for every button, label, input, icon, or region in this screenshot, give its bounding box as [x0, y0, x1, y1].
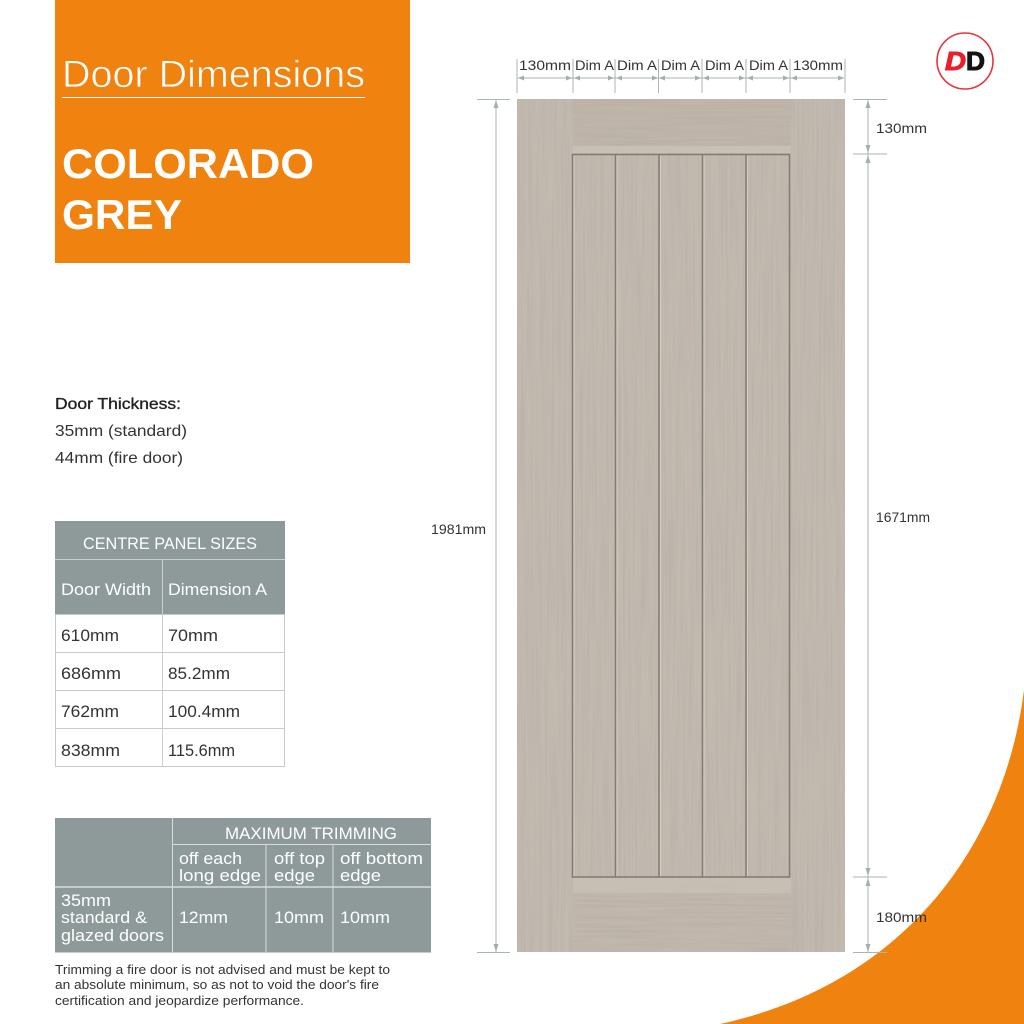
top dimension labels: Dim A — [617, 57, 658, 73]
top dimension labels: Dim A — [661, 57, 701, 73]
text block: door thickness: 35mm (standard) — [55, 423, 187, 440]
table: maximum trimming: 12mm — [179, 908, 228, 927]
door illustration — [517, 99, 845, 952]
text block: door thickness — [55, 396, 187, 467]
centre panels with grooves — [572, 154, 790, 877]
logo: DD — [937, 33, 993, 89]
table: maximum trimming: standard & — [61, 908, 148, 927]
logo: DD: D — [966, 46, 985, 76]
left height dimension: 1981mm — [431, 100, 510, 952]
heading: Door Dimensions: Door Dimensions — [62, 54, 365, 96]
top dimension markers — [517, 57, 845, 93]
orange corner curve — [720, 690, 1024, 1024]
right dimension labels: 1671mm — [876, 509, 930, 525]
table: centre panel sizes: Door Width — [61, 580, 151, 599]
table: centre panel sizes: CENTRE PANEL SIZES — [83, 534, 257, 553]
top dimension labels: Dim A — [575, 57, 615, 73]
table: maximum trimming: 10mm — [340, 908, 390, 927]
table: centre panel sizes: 115.6mm — [168, 741, 235, 760]
table: centre panel sizes: 610mm — [61, 626, 119, 645]
top dimension labels — [519, 57, 843, 73]
table: centre panel sizes: 100.4mm — [168, 702, 240, 721]
table: maximum trimming: edge — [274, 866, 315, 885]
top dimension labels: 130mm — [793, 57, 843, 73]
text block: door thickness: Door Thickness: — [55, 396, 181, 413]
table: centre panel sizes: 686mm — [61, 664, 121, 683]
table: centre panel sizes: 85.2mm — [168, 664, 230, 683]
table: centre panel sizes: 762mm — [61, 702, 119, 721]
text block: trimming note: an absolute minimum, so as not to void the door's fire — [55, 977, 379, 992]
heading: product name: COLORADO — [62, 140, 314, 187]
table: maximum trimming: edge — [340, 866, 381, 885]
table: maximum trimming: off each — [179, 849, 242, 868]
logo: DD: D — [945, 46, 966, 76]
left height dimension: 1981mm: 1981mm — [431, 521, 486, 537]
text block: trimming note: certification and jeopardize performance. — [55, 993, 304, 1008]
text block: trimming note — [55, 962, 390, 1008]
table: maximum trimming: off bottom — [340, 849, 423, 868]
right dimension labels — [876, 120, 930, 925]
heading: product name: GREY — [62, 191, 182, 238]
table: maximum trimming: MAXIMUM TRIMMING — [225, 824, 397, 843]
top rail — [573, 99, 791, 153]
text block: door thickness: 44mm (fire door) — [55, 450, 183, 467]
table: maximum trimming — [55, 818, 431, 952]
right dimension labels: 180mm — [876, 909, 927, 925]
table: centre panel sizes: Dimension A — [168, 580, 268, 599]
table: centre panel sizes — [55, 521, 285, 767]
table: maximum trimming: 35mm — [61, 891, 111, 910]
table: centre panel sizes: 70mm — [168, 626, 218, 645]
table: maximum trimming: 10mm — [274, 908, 324, 927]
title panel — [55, 0, 410, 263]
table: maximum trimming: off top — [274, 849, 325, 868]
table: centre panel sizes: 838mm — [61, 741, 120, 760]
top dimension labels: Dim A — [705, 57, 745, 73]
right dimension labels: 130mm — [876, 120, 927, 136]
right dimension markers — [853, 100, 930, 952]
heading: product name — [62, 140, 314, 238]
text block: trimming note: Trimming a fire door is not advised and must be kept to — [55, 962, 390, 977]
bottom rail — [573, 878, 791, 952]
table: maximum trimming: glazed doors — [61, 926, 164, 945]
table: maximum trimming: long edge — [179, 866, 261, 885]
top dimension labels: Dim A — [749, 57, 789, 73]
top dimension labels: 130mm — [519, 57, 571, 73]
